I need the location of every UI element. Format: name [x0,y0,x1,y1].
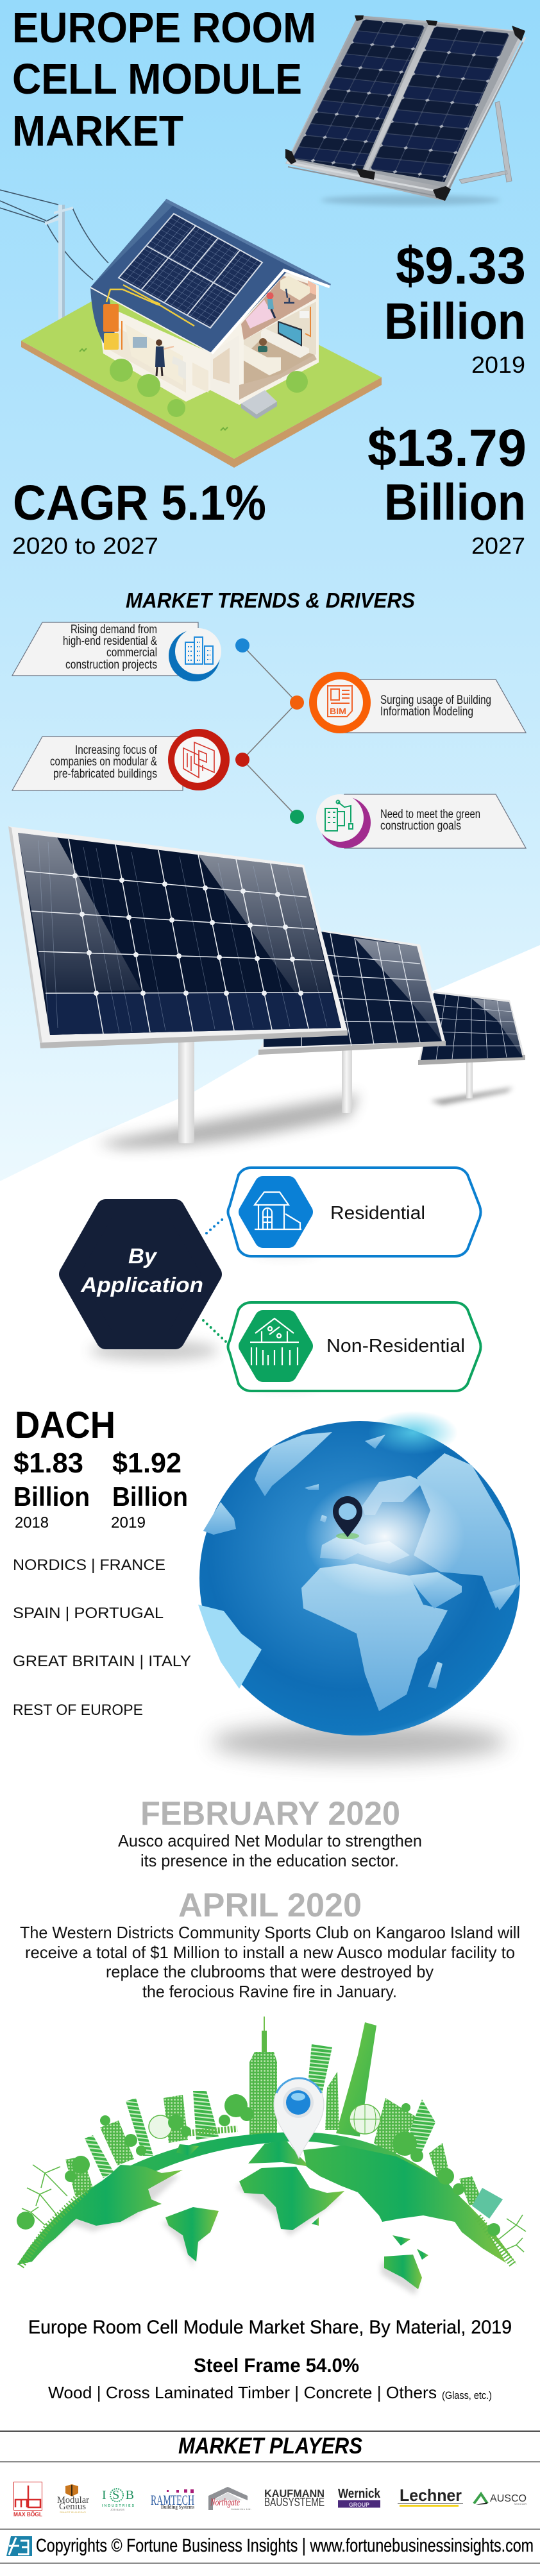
roof [90,200,330,354]
recent development: February 2020 [118,1795,422,1870]
trend card: modular focus [12,729,230,790]
logo: ISB: ISB [102,2488,134,2502]
trend card: rising demand: commercial [106,646,157,660]
logo: Ausco: AUSCO [490,2493,527,2504]
skyline [65,2017,503,2219]
market share by material: Steel Frame 54.0% [194,2354,359,2376]
front panel [8,826,348,1048]
wind turbines [22,2165,526,2252]
title: EUROPE ROOM [12,4,316,52]
stat: 2019 market size [384,237,526,378]
market share by material [28,2317,512,2402]
trend card: BIM usage: Surging usage of Building [380,694,491,707]
logo: ISB: INDUSTRIES [102,2504,135,2508]
illustration: green city on globe [17,2017,526,2295]
bushes and steps [80,348,308,431]
icon: BIM document: BIM [330,706,346,716]
trend card: BIM usage: Information Modeling [380,705,473,719]
far panel [418,991,525,1065]
poles [466,1059,473,1098]
icon: map pin [333,1496,362,1539]
logo: Kaufmann Bausysteme: KAUFMANN [264,2487,325,2500]
trend card: rising demand: Rising demand from [71,623,157,636]
recent development: April 2020: replace the clubrooms that were destroyed by [106,1962,434,1981]
stat: 2027 market size [367,419,527,559]
icon: green building and crane [325,801,353,831]
node: orange [290,695,304,710]
recent development: February 2020: its presence in the education sector. [140,1851,399,1870]
logo: Modular Genius: Modular [57,2495,89,2505]
trend card: green goals: Need to meet the green [380,808,480,821]
heading: market players: MARKET PLAYERS [178,2434,362,2459]
recent development: April 2020: the ferocious Ravine fire in January. [142,1982,397,2001]
shadows [90,1243,317,1386]
ground shadows [96,1088,513,1148]
stat: 2027 market size: $13.79 [367,419,527,477]
trend card: green goals: construction goals [380,819,461,833]
regional text: DACH: Billion [112,1481,188,1512]
segment: non-residential: Non-Residential [326,1336,465,1356]
illustration: folding solar panel [285,15,525,205]
middle panel [258,930,446,1055]
trend card: modular focus: Increasing focus of [75,744,158,757]
logo: Wernick Group: Wernick [338,2487,381,2501]
by application diagram [69,1168,481,1391]
logo: Max Bögl [13,2482,42,2518]
house body [96,269,319,405]
logo: Wernick Group [338,2487,381,2509]
trend card: modular focus: pre-fabricated buildings [53,767,157,781]
hub: by application: By [128,1244,158,1268]
divider lines [0,2430,540,2564]
regional text: DACH: 2018 [15,1514,49,1531]
logo: Kaufmann Bausysteme: BAUSYSTEME [264,2496,325,2509]
market share by material: Wood | Cross Laminated Timber | Concrete | Others [48,2383,437,2402]
region list: SPAIN | PORTUGAL [13,1605,164,1622]
stat: CAGR [12,475,266,559]
logo: Modular Genius: Genius [59,2502,86,2512]
hub: by application [69,1209,212,1340]
recent development: April 2020: receive a total of $1 Million to install a new Ausco modular facility to [25,1943,515,1962]
icon: BIM document [328,686,352,717]
logo: ISB: JOB BASIS [110,2508,124,2511]
trend card: rising demand: construction projects [65,658,157,672]
icon: commercial building [250,1318,299,1365]
segment: non-residential [228,1302,481,1391]
logo: Ramtech: Building Systems [161,2504,194,2510]
regional text: DACH: $1.92 [112,1447,181,1479]
logos: market players [13,2482,527,2518]
recent development: April 2020: APRIL 2020 [178,1887,362,1924]
logo: Ramtech: RAMTECH [151,2492,194,2508]
region list: NORDICS | FRANCE [13,1557,165,1574]
regional text: DACH: Billion [13,1481,90,1512]
ground plot [21,263,382,468]
heading: market trends and drivers: MARKET TRENDS & DRIVERS [126,588,415,612]
logo: Northgate [208,2487,251,2511]
utility boxes and resident [103,304,186,380]
region list: GREAT BRITAIN | ITALY [13,1653,191,1670]
node: blue [235,638,249,653]
trend card: rising demand: high-end residential & [63,635,157,648]
connector lines [242,645,297,817]
logo: Ausco: MODULAR [514,2503,527,2505]
logo: Ausco [474,2493,527,2505]
node: green [290,810,304,824]
world rim and continents [17,2132,517,2289]
logo: ISB [102,2488,135,2511]
icon: location pin [274,2078,324,2158]
logo: Northgate: Northgate [210,2497,240,2508]
trend card: rising demand [12,622,221,681]
trees [17,2094,500,2236]
stat: 2027 market size: 2027 [471,533,525,559]
regional text: DACH: $1.83 [13,1447,83,1479]
illustration: globe centred on Europe [198,1411,520,1761]
power lines and pole [0,190,108,332]
market share by material: Europe Room Cell Module Market Share, By Material, 2019 [28,2317,512,2338]
stat: CAGR: CAGR 5.1% [13,475,266,531]
stat: 2019 market size: $9.33 [396,237,526,295]
logo: Fortune Business Insights [6,2536,32,2556]
logo: Max Bögl: MAX BÖGL [13,2511,42,2518]
trend card: green goals [316,794,526,848]
hub: by application: Application [80,1273,203,1297]
icon: prefabricated panels [183,742,214,778]
recent development: February 2020: Ausco acquired Net Modular to strengthen [118,1831,422,1850]
recent development: April 2020: The Western Districts Community Sports Club on Kangaroo Island will [20,1923,520,1942]
region list: REST OF EUROPE [13,1702,143,1719]
illustration: row of three solar panels [8,826,525,1148]
segment: residential: Residential [330,1203,425,1224]
logo: Northgate: Industries Ltd. [231,2507,251,2511]
continents shadow [26,2171,419,2295]
title: CELL MODULE [12,55,302,103]
stat: 2019 market size: Billion [384,293,526,350]
logo: Lechner: Lechner [400,2486,462,2505]
logo: Ramtech [151,2489,194,2510]
title [12,4,316,155]
dotted connectors [207,1216,226,1233]
logo: Wernick Group: GROUP [349,2502,370,2509]
icon: buildings [185,637,213,664]
logo: Modular Genius: SMART BUILDING [60,2511,86,2514]
recent development: February 2020: FEBRUARY 2020 [140,1795,400,1832]
recent development: April 2020 [20,1887,520,2001]
illustration: house with rooftop solar [0,190,382,468]
icon: house [255,1192,301,1229]
region list [13,1557,191,1719]
stat: 2019 market size: 2019 [471,352,525,378]
regional text: DACH [13,1404,188,1531]
segment: residential [228,1168,481,1256]
regional text: DACH: 2019 [111,1514,146,1531]
node: red [235,753,249,767]
stat: CAGR: 2020 to 2027 [12,533,158,559]
title: MARKET [12,107,183,155]
market share by material: (Glass, etc.) [442,2389,492,2401]
trend card: modular focus: companies on modular & [50,755,157,769]
regional text: DACH: DACH [15,1404,115,1446]
trend card: BIM usage [309,672,526,733]
logo: Kaufmann Bausysteme [264,2487,325,2509]
logo: Modular Genius [57,2484,89,2514]
grass [21,2189,513,2266]
stat: 2027 market size: Billion [384,473,526,531]
